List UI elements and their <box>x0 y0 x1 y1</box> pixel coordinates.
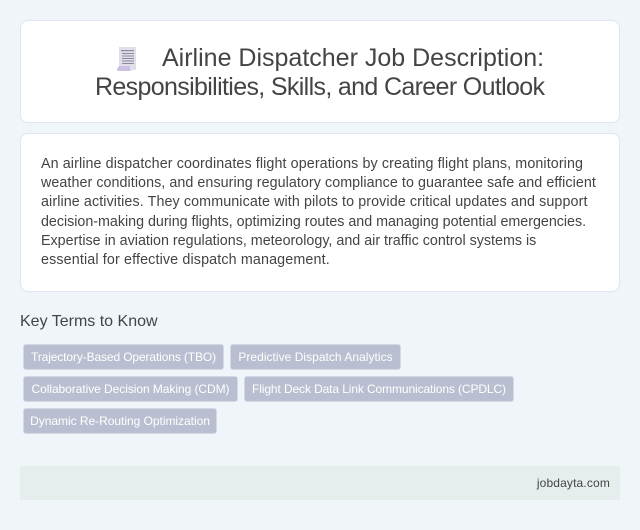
description text: weather conditions, and ensuring regulatory compliance to guarantee safe and efficient <box>41 174 596 190</box>
description text: essential for effective dispatch management. <box>41 252 330 268</box>
chip: predictive <box>230 344 401 370</box>
footer bar <box>20 466 620 500</box>
description text: airline activities. They communicate with pilots to provide critical updates and support <box>41 194 588 210</box>
panel: key term chips <box>23 344 514 434</box>
title line 1: Airline Dispatcher Job Description: <box>162 44 544 72</box>
chip: CDM <box>23 376 238 402</box>
chip: CPDLC <box>244 376 514 402</box>
description text: decision-making during flights, optimizing routes and managing potential emergencies. <box>41 214 586 230</box>
chip: TBO: Trajectory-Based Operations (TBO) <box>31 350 216 364</box>
chip: re-routing <box>23 408 217 434</box>
description text <box>41 156 596 268</box>
panel: description card <box>20 133 620 292</box>
chip: CDM: Collaborative Decision Making (CDM) <box>32 382 229 396</box>
panel: title card <box>20 20 620 123</box>
footer source: jobdayta.com <box>537 476 610 490</box>
chip: TBO <box>23 344 224 370</box>
title line 2: Responsibilities, Skills, and Career Outlook <box>95 73 544 101</box>
heading: key terms: Key Terms to Know <box>20 313 158 330</box>
chip: predictive: Predictive Dispatch Analytics <box>238 350 393 364</box>
description text: An airline dispatcher coordinates flight operations by creating flight plans, monitoring <box>41 156 583 172</box>
description text: Expertise in aviation regulations, meteorology, and air traffic control systems is <box>41 232 536 248</box>
chip: CPDLC: Flight Deck Data Link Communications (CPDLC) <box>252 382 506 396</box>
chip: re-routing: Dynamic Re-Routing Optimization <box>30 414 210 428</box>
icon: document receipt <box>117 47 136 71</box>
